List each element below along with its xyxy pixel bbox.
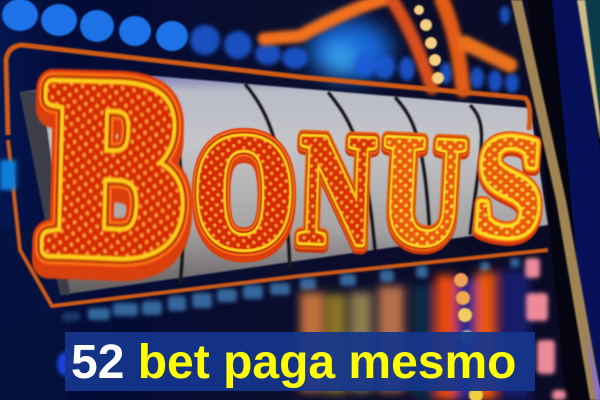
blurred lower columns — [300, 270, 530, 400]
marquee bulbs — [414, 5, 444, 84]
letter U: U — [377, 102, 469, 278]
letter O: O — [194, 103, 293, 280]
letter N: N — [296, 101, 378, 279]
letter U: U — [377, 105, 469, 281]
letter U: U — [377, 102, 469, 278]
letter O: O — [194, 103, 293, 280]
letter B: B — [44, 31, 186, 305]
top blue lights — [2, 0, 519, 93]
letter O: O — [194, 103, 293, 280]
blue glow — [308, 20, 392, 80]
letter B: B — [44, 31, 186, 305]
title banner: 52 bet paga mesmo — [71, 336, 516, 389]
letter O: O — [194, 103, 293, 280]
letter B: B — [43, 42, 186, 316]
blue glow left of banner — [0, 160, 79, 377]
letter N: N — [296, 101, 378, 279]
letter S: S — [470, 104, 549, 268]
letter B: B — [44, 31, 186, 305]
machine frame — [6, 45, 548, 306]
letter S: S — [470, 104, 549, 268]
right cabinet edge — [511, 0, 600, 400]
letter N: N — [296, 101, 378, 279]
letter B: B — [44, 31, 186, 305]
letter N: N — [296, 104, 378, 282]
lower blue lights — [62, 258, 520, 321]
pink lights — [525, 258, 566, 400]
centre bulbs — [454, 273, 483, 400]
letter O: O — [194, 103, 293, 280]
letter U: U — [377, 102, 469, 278]
letter S: S — [470, 104, 549, 268]
letter S: S — [470, 106, 548, 271]
reels — [20, 76, 548, 295]
letter O: O — [194, 108, 293, 285]
letter S: S — [470, 104, 549, 268]
letter U: U — [377, 102, 469, 278]
orange marquee arches — [264, 0, 510, 90]
letter N: N — [296, 101, 378, 279]
letter B: B — [44, 31, 186, 305]
